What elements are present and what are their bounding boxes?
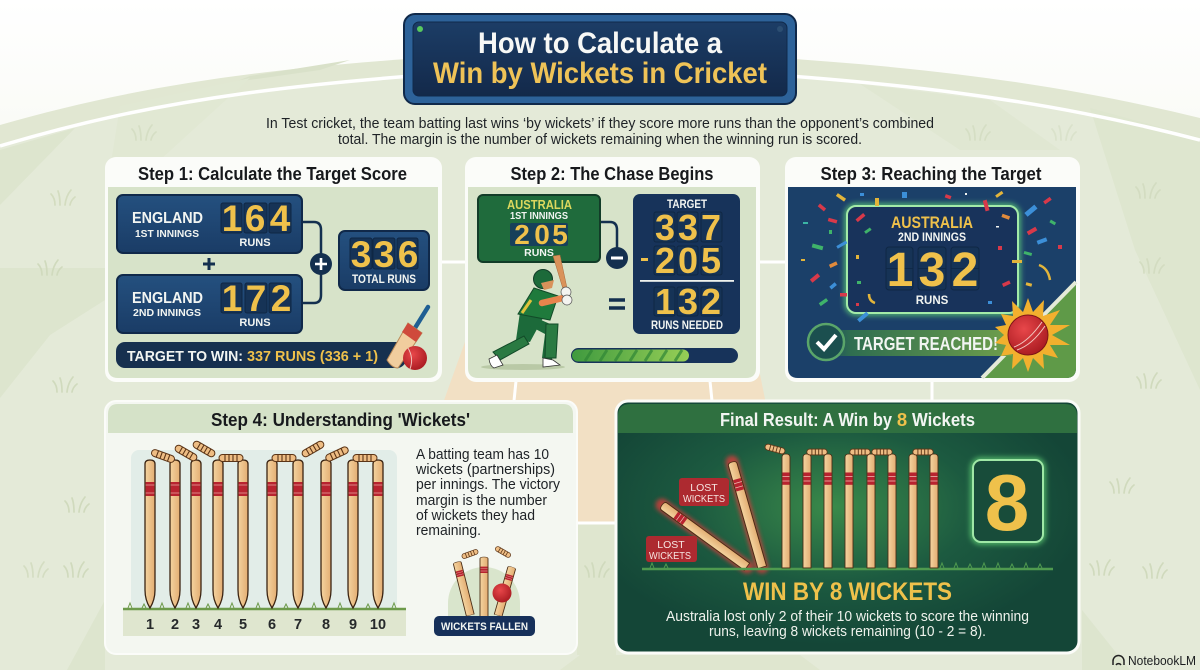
target reached banner bbox=[808, 324, 1012, 360]
icon: wickets fallen bbox=[434, 546, 535, 636]
glowing scoreboard: RUNS bbox=[916, 295, 949, 307]
glowing scoreboard: 2ND INNINGS bbox=[898, 230, 966, 244]
calculation board: 1 bbox=[655, 281, 675, 322]
confetti bbox=[801, 191, 1062, 322]
wicket numbers: 8 bbox=[322, 617, 330, 633]
lost wickets: fallen stumps bbox=[659, 461, 767, 570]
glowing number 8 bbox=[973, 458, 1043, 547]
green pitch corner bbox=[982, 282, 1076, 378]
target reached banner: TARGET REACHED! bbox=[854, 334, 998, 354]
calculation board: TARGET bbox=[667, 199, 707, 211]
scoreboard: England 1st innings: 1ST INNINGS bbox=[135, 228, 199, 240]
wicket numbers: 4 bbox=[214, 617, 222, 633]
panel: step 1 bbox=[105, 157, 442, 382]
calculation board: 0 bbox=[678, 240, 698, 281]
calculation board: 2 bbox=[701, 281, 721, 322]
calculation board: 7 bbox=[701, 207, 721, 248]
scoreboard: England 2nd innings: ENGLAND bbox=[132, 290, 203, 307]
label: lost wickets lower: LOST bbox=[657, 539, 685, 551]
scoreboard: England 1st innings: ENGLAND bbox=[132, 210, 203, 227]
icon: ball with starburst bbox=[995, 298, 1070, 372]
calculation board: 3 bbox=[655, 207, 675, 248]
explanation text: per innings. The victory bbox=[416, 477, 561, 493]
icon: check circle bbox=[808, 324, 844, 360]
label: lost wickets lower: WICKETS bbox=[649, 550, 691, 562]
result explanation bbox=[666, 609, 1029, 640]
glowing scoreboard: 3 bbox=[919, 244, 945, 297]
intro text: In Test cricket, the team batting last wins ‘by wickets’ if they score more runs than the opponent’s combined bbox=[266, 116, 934, 132]
scoreboard: England 1st innings bbox=[117, 195, 302, 253]
icon: equals bbox=[609, 300, 625, 308]
scoreboard: England 2nd innings: 2 bbox=[271, 278, 291, 319]
icon: plus circle bbox=[310, 253, 332, 275]
wicket numbers: 6 bbox=[268, 617, 276, 633]
ten wickets diagram bbox=[123, 440, 406, 636]
label: lost wickets upper: WICKETS bbox=[683, 493, 725, 505]
scoreboard: total runs: 3 bbox=[351, 234, 371, 275]
panel: step 2 bbox=[465, 157, 760, 382]
heading: step 4: Step 4: Understanding 'Wickets' bbox=[211, 409, 470, 430]
glowing scoreboard: 2 bbox=[952, 244, 978, 297]
intro text bbox=[266, 116, 934, 148]
calculation board: 3 bbox=[678, 281, 698, 322]
explanation text: remaining. bbox=[416, 523, 481, 539]
wicket numbers bbox=[146, 617, 386, 633]
scoreboard: England 1st innings: 4 bbox=[270, 198, 291, 239]
glowing scoreboard bbox=[847, 206, 1018, 313]
icon: minus circle bbox=[606, 247, 628, 269]
glowing scoreboard: AUSTRALIA bbox=[891, 214, 973, 232]
target to win bar bbox=[116, 342, 406, 368]
progress bar bbox=[571, 348, 738, 363]
target to win bar: 337 RUNS (336 + 1) bbox=[247, 348, 378, 365]
scoreboard: England 2nd innings: 7 bbox=[246, 278, 266, 319]
scoreboard: total runs: 6 bbox=[398, 234, 418, 275]
heading: final result: 8 bbox=[897, 409, 907, 430]
wicket numbers: 1 bbox=[146, 617, 154, 633]
icon: wickets fallen: WICKETS FALLEN bbox=[441, 621, 528, 633]
label: lost wickets lower bbox=[646, 536, 697, 562]
calculation board: 3 bbox=[678, 207, 698, 248]
panel: step 3 bbox=[785, 157, 1080, 382]
scoreboard: total runs bbox=[339, 231, 429, 290]
explanation text: margin is the number bbox=[416, 493, 547, 509]
ground bbox=[642, 563, 1053, 569]
result explanation: runs, leaving 8 wickets remaining (10 - 2 = 8). bbox=[709, 624, 986, 640]
scoreboard: England 2nd innings: 2ND INNINGS bbox=[133, 307, 201, 319]
intro text: total. The margin is the number of wickets remaining when the winning run is scored. bbox=[338, 132, 862, 148]
heading: step 2: Step 2: The Chase Begins bbox=[510, 163, 714, 184]
calculation board: 5 bbox=[701, 240, 721, 281]
wicket numbers: 2 bbox=[171, 617, 179, 633]
result explanation: Australia lost only 2 of their 10 wickets to score the winning bbox=[666, 609, 1029, 625]
connector: subtract bbox=[600, 222, 617, 248]
panel: final result bbox=[616, 401, 1079, 653]
scoreboard: England 1st innings: 6 bbox=[245, 198, 265, 239]
label: lost wickets upper bbox=[679, 478, 729, 506]
explanation text: A batting team has 10 bbox=[416, 447, 549, 463]
scoreboard: Australia 1st innings: AUSTRALIA bbox=[507, 198, 572, 212]
plus sign bbox=[203, 258, 215, 270]
heading: step 1: Step 1: Calculate the Target Score bbox=[138, 163, 407, 184]
heading: final result: Final Result: A Win by bbox=[720, 409, 893, 430]
wicket numbers: 9 bbox=[349, 617, 357, 633]
scoreboard: England 1st innings: RUNS bbox=[239, 237, 271, 249]
result headline: WIN BY 8 WICKETS bbox=[743, 578, 952, 606]
panel: step 4 bbox=[105, 401, 577, 654]
wicket numbers: 3 bbox=[192, 617, 200, 633]
label: lost wickets upper: LOST bbox=[690, 482, 718, 494]
explanation text: wickets (partnerships) bbox=[415, 462, 555, 478]
calculation board bbox=[633, 194, 740, 334]
icon: batsman bbox=[481, 255, 572, 370]
explanation text bbox=[415, 447, 561, 539]
title line 2: Win by Wickets in Cricket bbox=[433, 57, 767, 90]
glowing scoreboard: 1 bbox=[887, 244, 913, 297]
NotebookLM logo: NotebookLM bbox=[1128, 654, 1196, 668]
heading: step 3: Step 3: Reaching the Target bbox=[820, 163, 1042, 184]
explanation text: of wickets they had bbox=[416, 508, 535, 524]
scoreboard: Australia 1st innings: 2 bbox=[514, 219, 530, 250]
scoreboard: total runs: 3 bbox=[374, 234, 394, 275]
wicket numbers: 5 bbox=[239, 617, 247, 633]
glowing number 8: 8 bbox=[985, 458, 1029, 547]
scoreboard: England 2nd innings: 1 bbox=[222, 278, 242, 319]
scoreboard: total runs: TOTAL RUNS bbox=[352, 274, 416, 286]
scoreboard: Australia 1st innings: 0 bbox=[534, 219, 550, 250]
scoreboard: Australia 1st innings: 1ST INNINGS bbox=[510, 211, 568, 222]
scoreboard: Australia 1st innings: 5 bbox=[552, 219, 568, 250]
title line 1: How to Calculate a bbox=[478, 27, 722, 60]
scoreboard: Australia 1st innings: RUNS bbox=[524, 247, 554, 259]
scoreboard: England 2nd innings: RUNS bbox=[239, 317, 271, 329]
wicket numbers: 7 bbox=[294, 617, 302, 633]
scoreboard: Australia 1st innings bbox=[478, 195, 600, 262]
scoreboard: England 2nd innings bbox=[117, 275, 302, 333]
calculation board: RUNS NEEDED bbox=[651, 320, 723, 332]
title banner bbox=[404, 14, 796, 104]
heading: final result: Wickets bbox=[912, 409, 975, 430]
calculation board: 2 bbox=[655, 240, 675, 281]
wicket numbers: 10 bbox=[370, 617, 386, 633]
eight standing wickets bbox=[764, 443, 938, 568]
icon: bat and ball bbox=[387, 307, 428, 370]
connector: sum bracket bbox=[302, 222, 321, 303]
scoreboard: England 1st innings: 1 bbox=[222, 198, 242, 239]
target to win bar: TARGET TO WIN: bbox=[127, 348, 243, 365]
